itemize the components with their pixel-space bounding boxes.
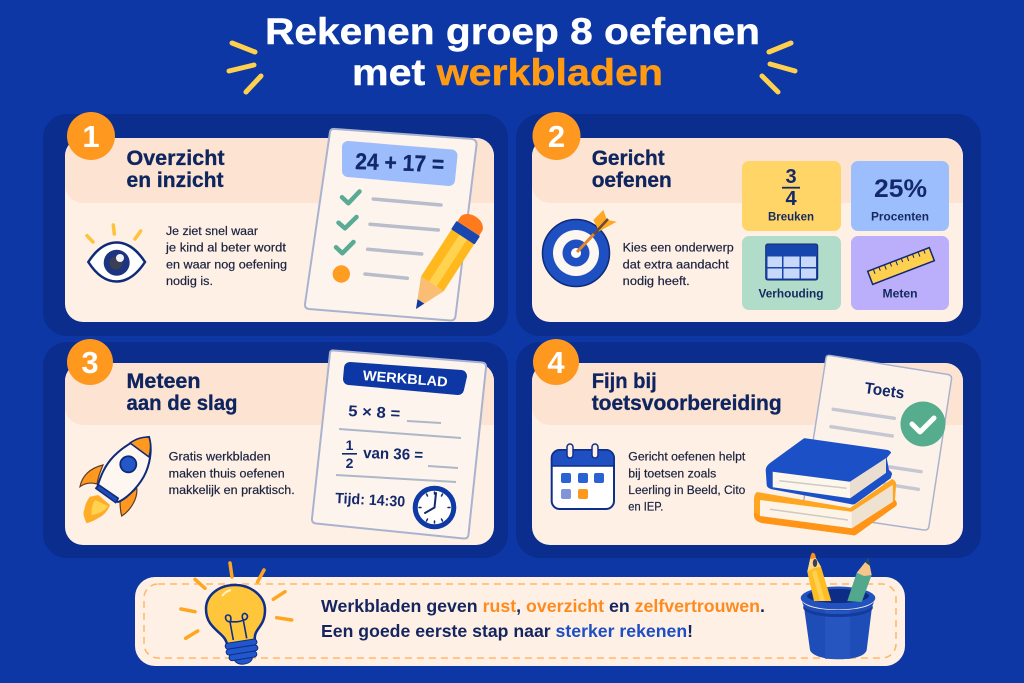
body text: nodig heeft. xyxy=(623,276,690,288)
test paper: Toets xyxy=(863,380,906,403)
heading: toetsvoorbereiding xyxy=(592,392,782,415)
tile: Verhouding: Verhouding xyxy=(758,287,824,301)
worksheet illustration: 5 × 8 = xyxy=(348,403,401,423)
icon: calendar xyxy=(552,444,614,509)
body text: dat extra aandacht xyxy=(623,259,730,271)
number badge 4 xyxy=(533,339,579,385)
heading: Gericht xyxy=(592,147,665,170)
icon: target with dart xyxy=(542,210,617,286)
heading: aan de slag xyxy=(126,392,238,415)
closing message xyxy=(321,596,765,641)
body text xyxy=(628,452,746,514)
worksheet illustration xyxy=(312,350,486,539)
tile: Breuken: 3 xyxy=(785,166,797,188)
title: Rekenen groep 8 oefenen xyxy=(265,11,760,52)
body text: Gratis werkbladen xyxy=(169,452,271,464)
tile: Procenten: Procenten xyxy=(871,210,929,224)
title xyxy=(265,11,760,93)
icon: clock xyxy=(415,488,454,527)
number badge 4: 4 xyxy=(547,345,565,380)
body text: Kies een onderwerp xyxy=(623,243,734,255)
body text: nodig is. xyxy=(166,276,213,288)
icon: title sparks right xyxy=(762,43,795,92)
worksheet illustration: 1 xyxy=(346,437,354,453)
body text: en IEP. xyxy=(628,502,663,514)
panel: gericht oefenen xyxy=(516,112,981,336)
heading xyxy=(126,370,238,415)
number badge 1: 1 xyxy=(82,119,100,154)
body text xyxy=(165,226,287,288)
heading xyxy=(126,147,225,192)
worksheet illustration: WERKBLAD xyxy=(362,367,448,390)
footer banner xyxy=(135,553,905,667)
test paper xyxy=(802,355,952,530)
worksheet illustration: 24 + 17 = xyxy=(355,148,445,177)
heading: Fijn bij xyxy=(592,370,657,393)
body text: je kind al beter wordt xyxy=(165,243,287,255)
tile: Procenten: 25% xyxy=(874,175,927,203)
tile: Meten xyxy=(851,236,949,310)
heading: Meteen xyxy=(126,370,200,393)
panel: overzicht en inzicht xyxy=(43,112,508,336)
icon: pencil cup xyxy=(801,553,875,659)
tile: Meten: Meten xyxy=(882,287,918,301)
icon: stack of books xyxy=(754,438,897,535)
number badge 1 xyxy=(67,112,115,160)
worksheet illustration: van 36 = xyxy=(363,445,423,464)
icon: pencil xyxy=(404,209,488,317)
icon: title sparks left xyxy=(229,43,261,92)
panel: meteen aan de slag xyxy=(43,339,508,558)
worksheet illustration xyxy=(305,129,477,321)
closing message: Werkbladen geven rust, overzicht en zelfvertrouwen. xyxy=(321,596,765,616)
tile: Breuken: 4 xyxy=(785,188,797,210)
panel: fijn bij toetsvoorbereiding xyxy=(516,339,981,558)
worksheet illustration: Tijd: 14:30 xyxy=(335,490,406,511)
body text: Je ziet snel waar xyxy=(166,226,258,238)
heading xyxy=(592,147,672,192)
body text xyxy=(169,452,295,497)
icon: eye xyxy=(87,225,145,282)
tile: Breuken xyxy=(742,161,841,231)
body text xyxy=(623,243,734,288)
number badge 2: 2 xyxy=(548,119,565,154)
body text: makkelijk en praktisch. xyxy=(169,485,295,497)
number badge 2 xyxy=(532,112,580,160)
heading xyxy=(592,370,782,415)
icon: rocket xyxy=(80,437,151,523)
body text: Gericht oefenen helpt xyxy=(628,452,746,464)
heading: Overzicht xyxy=(126,147,225,170)
title: met werkbladen xyxy=(352,52,663,93)
number badge 3 xyxy=(67,339,113,385)
number badge 3: 3 xyxy=(81,345,99,380)
body text: Leerling in Beeld, Cito xyxy=(628,485,745,497)
tile: Breuken: Breuken xyxy=(768,210,814,224)
worksheet illustration: 2 xyxy=(346,455,354,471)
tile: Verhouding xyxy=(742,236,841,310)
body text: bij toetsen zoals xyxy=(628,468,717,480)
body text: en waar nog oefening xyxy=(166,259,287,271)
closing message: Een goede eerste stap naar sterker rekenen! xyxy=(321,621,693,641)
heading: oefenen xyxy=(592,169,672,192)
icon: light bulb xyxy=(181,563,292,667)
heading: en inzicht xyxy=(126,169,224,192)
body text: maken thuis oefenen xyxy=(169,468,285,480)
tile: Procenten xyxy=(851,161,949,231)
